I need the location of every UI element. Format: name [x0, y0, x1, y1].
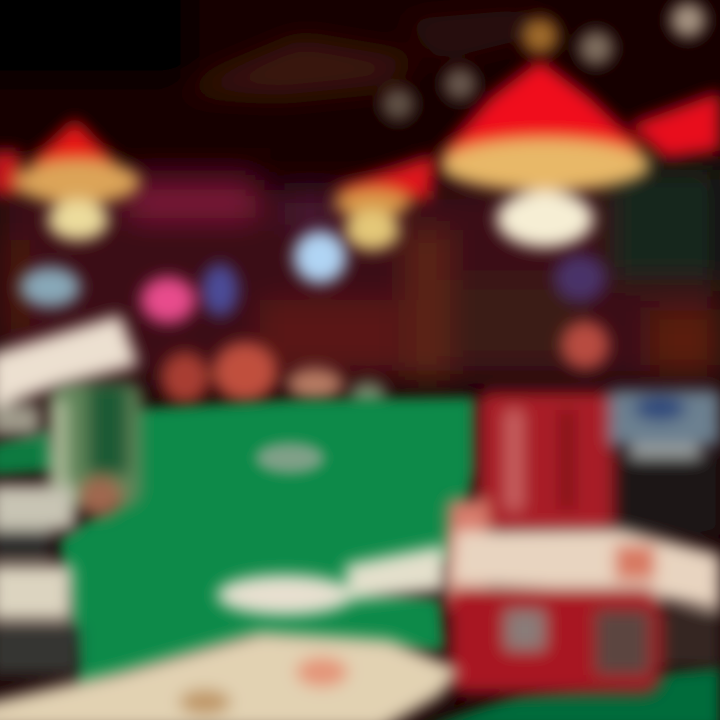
neon signs [20, 231, 606, 323]
background: dark ceiling and maroon wall [0, 0, 720, 380]
chip stack: white and red foreground right [450, 528, 720, 693]
lamp: left [0, 120, 140, 240]
chip stack: green left [50, 382, 142, 517]
ceiling lights [382, 3, 705, 120]
chip stack: white left foreground [0, 485, 78, 675]
white chips centre foreground [217, 545, 445, 615]
chip stack: cream left [0, 315, 138, 435]
lamp: centre [330, 155, 435, 250]
chip stack: red right [448, 390, 720, 610]
far chip stacks [161, 321, 609, 410]
cards: foreground table edge [0, 632, 460, 720]
green felt table [0, 398, 720, 720]
lamp: large right [440, 60, 720, 247]
chip on felt [256, 443, 324, 473]
